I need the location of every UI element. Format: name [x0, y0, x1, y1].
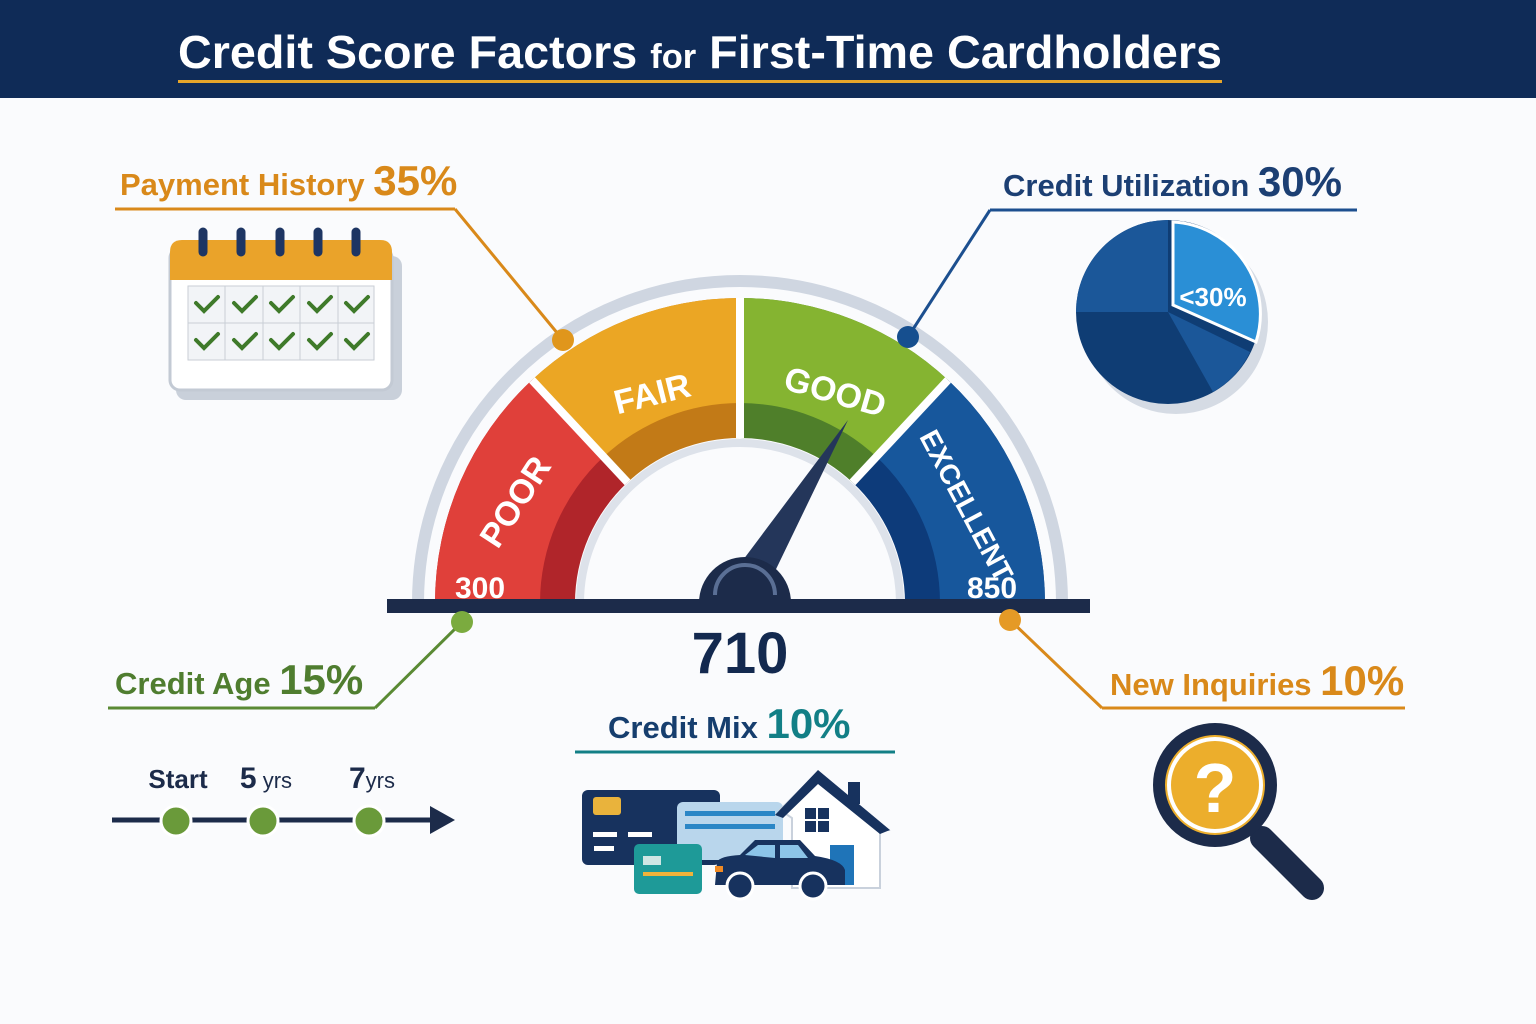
pie chart [1076, 220, 1268, 414]
callout: credit utilization [897, 158, 1357, 348]
timeline: 5 yrs [240, 762, 292, 795]
gauge labels: GOOD [780, 360, 890, 425]
title bar [0, 0, 1536, 98]
pie chart: <30% [1179, 282, 1247, 312]
timeline: 7yrs [349, 762, 395, 795]
callout: credit mix: Credit Mix 10% [608, 700, 851, 747]
callout: credit utilization: Credit Utilization 30% [1003, 158, 1342, 205]
gauge labels: EXCELLENT [914, 425, 1019, 586]
callout: payment history: Payment History 35% [120, 157, 457, 204]
timeline [112, 762, 455, 836]
icon: magnifier: ? [1194, 749, 1236, 827]
callout: credit age: Credit Age 15% [115, 656, 363, 703]
gauge labels: POOR [473, 450, 559, 554]
gauge labels: FAIR [610, 367, 695, 422]
gauge labels [455, 360, 1019, 605]
callout: new inquiries [999, 609, 1405, 708]
timeline: Start [148, 764, 208, 794]
gauge labels: 850 [967, 572, 1017, 605]
gauge [387, 281, 1090, 613]
icon: credit mix items [582, 770, 890, 899]
callout: new inquiries: New Inquiries 10% [1110, 657, 1404, 704]
icon: calendar [170, 232, 402, 400]
needle [728, 420, 848, 592]
score 710: 710 [692, 621, 788, 686]
icon: magnifier [1159, 729, 1312, 888]
callout: payment history [115, 157, 574, 351]
gauge labels: 300 [455, 572, 505, 605]
title bar: Credit Score Factors for First-Time Cardholders [178, 26, 1222, 78]
callout: credit age [108, 611, 473, 708]
